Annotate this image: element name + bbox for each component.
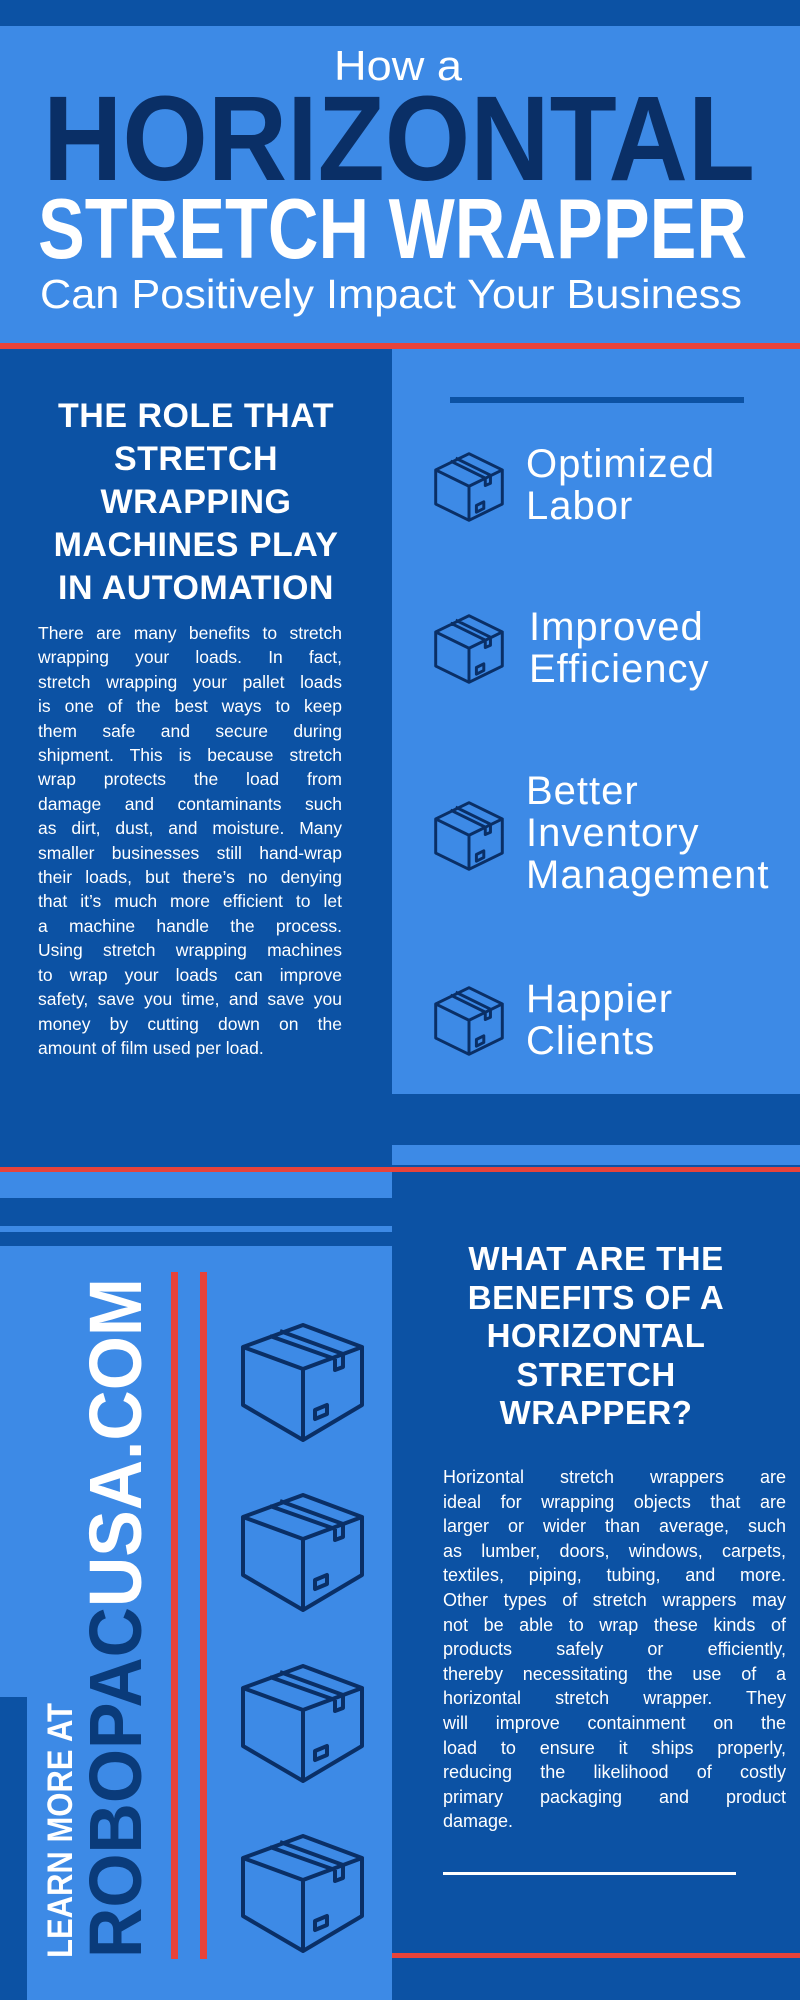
rotated url text: ROBOPACUSA.COM: [74, 1278, 157, 1958]
text: role body: amount of film used per load.: [38, 1038, 264, 1058]
icon: box 3: [434, 801, 504, 871]
panel: benefits list right: [392, 349, 800, 1094]
text: benefits body: will improve containment on the: [443, 1713, 786, 1733]
text: benefits body: thereby necessitating the use of a: [443, 1664, 786, 1684]
item: improved efficiency: Improved: [529, 605, 704, 649]
text: role body: wrapping your loads. In fact,: [38, 647, 342, 667]
item: optimized labor: Optimized: [526, 442, 715, 486]
text: benefits body: ideal for wrapping objects that are: [443, 1492, 786, 1512]
text: role body: [38, 623, 342, 1058]
text: role body: damage and contaminants such: [38, 794, 342, 814]
title: [38, 42, 755, 317]
text: benefits body: products safely or efficiently,: [443, 1639, 786, 1659]
title: How a: [334, 42, 463, 89]
item: better inventory: Management: [526, 853, 769, 897]
text: benefits body: load to ensure it ships properly,: [443, 1738, 786, 1758]
item: better inventory: Better: [526, 769, 639, 813]
header band: [0, 26, 800, 343]
text: role body: their loads, but there’s no denying: [38, 867, 342, 887]
panel: role left: [0, 349, 392, 1167]
text: benefits body: reducing the likelihood of costly: [443, 1762, 786, 1782]
rotated url text: LEARN MORE AT: [41, 1703, 80, 1958]
heading: role: IN AUTOMATION: [58, 569, 334, 607]
text: role body: shipment. This is because stretch: [38, 745, 342, 765]
text: benefits body: larger or wider than average, such: [443, 1516, 786, 1536]
text: role body: a machine handle the process.: [38, 916, 342, 936]
text: role body: is one of the best ways to keep: [38, 696, 342, 716]
icon: box 2: [434, 614, 504, 684]
text: role body: Using stretch wrapping machines: [38, 940, 342, 960]
icons: four boxes: [240, 1323, 364, 1953]
text: role body: that it’s much more efficient to let: [38, 891, 342, 911]
icon: box 1: [434, 452, 504, 522]
text: benefits body: primary packaging and product: [443, 1787, 786, 1807]
panel: benefits of horizontal wrapper: [392, 1172, 800, 2000]
heading: benefits: WHAT ARE THE: [468, 1240, 724, 1277]
item: happier clients: Clients: [526, 1019, 655, 1063]
text: role body: stretch wrapping your pallet loads: [38, 672, 342, 692]
heading: benefits: HORIZONTAL: [487, 1317, 705, 1354]
panel: learn more left: [0, 1172, 392, 2000]
text: role body: them safe and secure during: [38, 721, 342, 741]
item: happier clients: [526, 977, 673, 1063]
item: optimized labor: Labor: [526, 484, 633, 528]
item: improved efficiency: [529, 605, 709, 691]
text: benefits body: as lumber, doors, windows, carpets,: [443, 1541, 786, 1561]
heading: role: [54, 397, 338, 607]
item: optimized labor: [526, 442, 715, 528]
text: role body: money by cutting down on the: [38, 1014, 342, 1034]
item: better inventory: [526, 769, 769, 897]
text: benefits body: horizontal stretch wrapper. They: [443, 1688, 786, 1708]
text: role body: to wrap your loads can improve: [38, 965, 342, 985]
item: better inventory: Inventory: [526, 811, 700, 855]
icon: box 4: [434, 986, 504, 1056]
item: happier clients: Happier: [526, 977, 673, 1021]
text: benefits body: not be able to wrap these kinds of: [443, 1615, 786, 1635]
heading: benefits: WRAPPER?: [500, 1394, 692, 1431]
heading: benefits: STRETCH: [516, 1356, 676, 1392]
text: benefits body: textiles, piping, tubing, and more.: [443, 1565, 786, 1585]
text: benefits body: [443, 1467, 786, 1831]
text: role body: safety, save you time, and save you: [38, 989, 342, 1009]
text: benefits body: Horizontal stretch wrappers are: [443, 1467, 786, 1487]
text: benefits body: damage.: [443, 1811, 513, 1831]
heading: role: MACHINES PLAY: [54, 526, 338, 564]
heading: role: THE ROLE THAT: [58, 397, 334, 435]
heading: role: WRAPPING: [100, 483, 292, 521]
text: role body: as dirt, dust, and moisture. Many: [38, 818, 342, 838]
heading: benefits: [468, 1240, 724, 1431]
heading: role: STRETCH: [114, 440, 278, 478]
text: benefits body: Other types of stretch wrappers may: [443, 1590, 786, 1610]
text: role body: smaller businesses still hand-wrap: [38, 843, 342, 863]
heading: benefits: BENEFITS OF A: [468, 1278, 724, 1316]
title: Can Positively Impact Your Business: [40, 271, 742, 317]
text: role body: wrap protects the load from: [38, 769, 342, 789]
item: improved efficiency: Efficiency: [529, 647, 709, 691]
text: role body: There are many benefits to stretch: [38, 623, 342, 643]
